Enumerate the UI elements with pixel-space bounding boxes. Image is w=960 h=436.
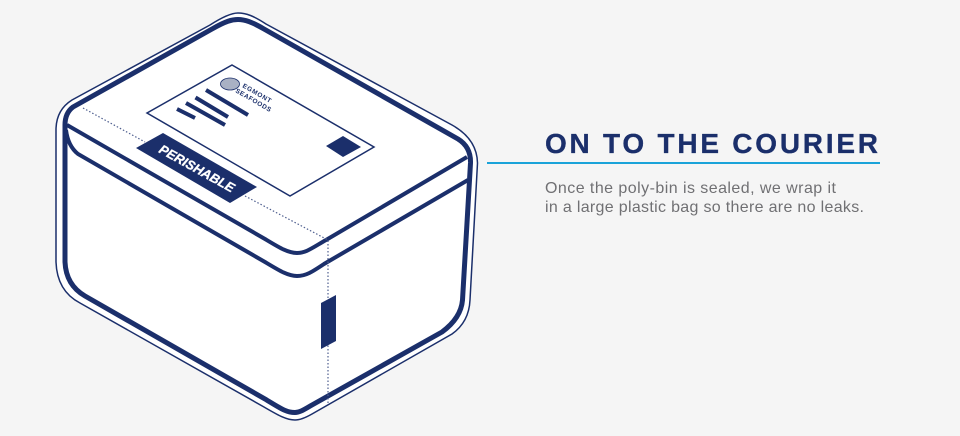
side tape tab xyxy=(321,295,336,349)
perishable tape label xyxy=(136,133,257,203)
body line 1: Once the poly-bin is sealed, we wrap it xyxy=(545,180,837,197)
box thick outline xyxy=(65,20,471,412)
heading rule xyxy=(487,162,880,164)
logo wordmark: Seafoods: SEAFOODS xyxy=(234,88,273,114)
address bars xyxy=(177,90,248,125)
logo emblem xyxy=(220,78,240,90)
lid upper edge xyxy=(67,125,467,253)
heading: ON TO THE COURIER xyxy=(545,128,878,159)
body text xyxy=(545,180,864,216)
stamp xyxy=(326,136,361,157)
box outer wrap outline xyxy=(56,13,478,420)
illustration: sealed poly-bin box xyxy=(56,13,478,420)
logo wordmark: Egmont: EGMONT xyxy=(241,83,272,105)
body line 2: in a large plastic bag so there are no leaks. xyxy=(545,199,864,216)
shipping label card xyxy=(147,65,374,196)
lid lower edge xyxy=(66,130,468,276)
perishable tape label: PERISHABLE xyxy=(157,142,238,196)
dotted seam lines xyxy=(83,108,328,403)
